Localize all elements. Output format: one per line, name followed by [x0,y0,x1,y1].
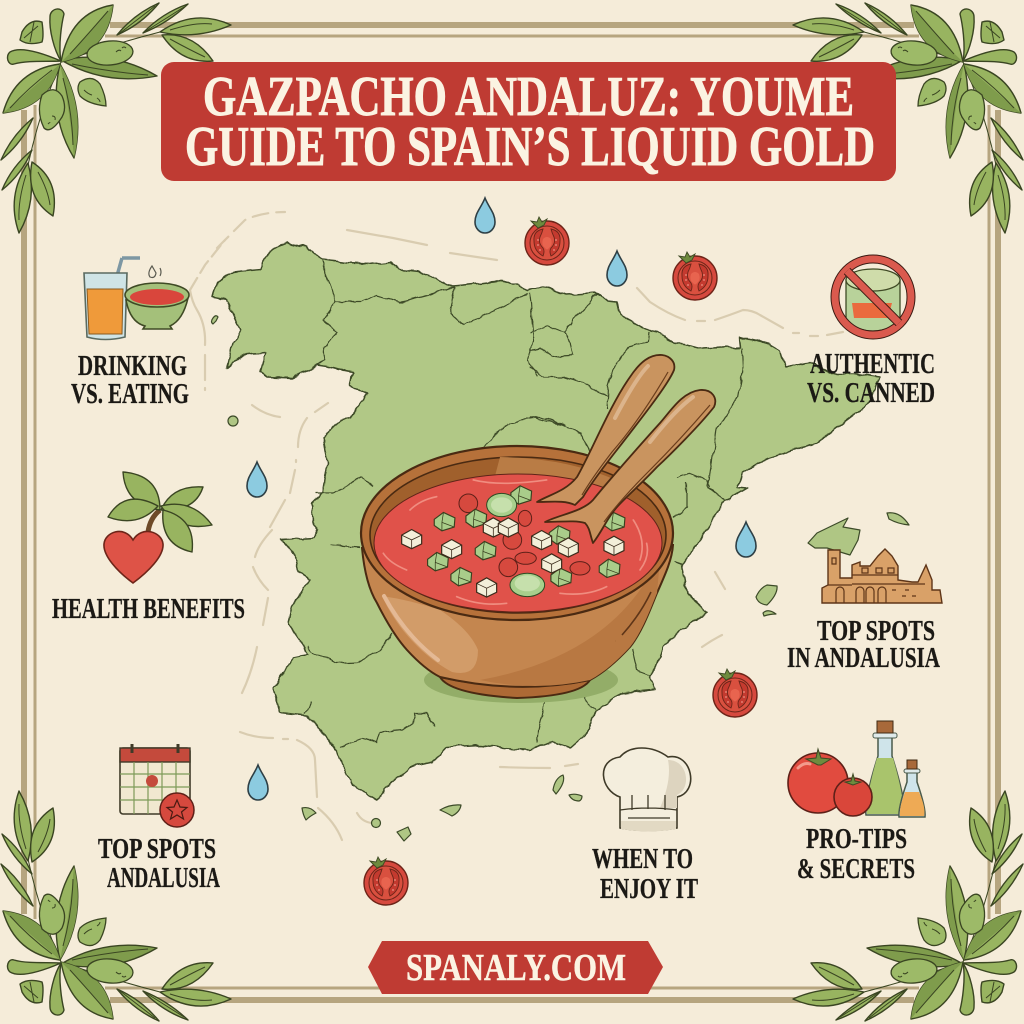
floating water drops [247,198,756,800]
footer ribbon [368,941,663,994]
label: AUTHENTIC [810,348,935,380]
bowl foot [440,677,590,698]
bottom-right olive branch [793,791,1023,1021]
label: ANDALUSIA [107,862,220,894]
label: ENJOY IT [600,873,698,905]
label [592,843,698,905]
bowl body [362,545,673,687]
icon: heart and palm [104,472,212,583]
label [787,615,940,674]
label: TOP SPOTS [817,615,935,647]
label: DRINKING [78,350,187,382]
label: VS. EATING [71,378,189,410]
icon: chef hat [603,748,691,832]
label: TOP SPOTS [98,833,216,865]
label [98,833,220,894]
panel: when to enjoy it [592,748,698,905]
label [71,350,189,410]
icon: juice glass and soup bowl [84,258,189,340]
central gazpacho bowl [361,355,715,703]
icon: castle [822,549,942,603]
label [797,823,915,885]
decorative route dashes [190,212,843,840]
label: HEALTH BENEFITS [52,593,245,625]
gazpacho soup [374,474,662,612]
mainland and regions [213,243,880,800]
icon: crossed-out can [835,259,911,335]
label: WHEN TO [592,843,693,875]
vegetable pieces [402,486,625,597]
icon: calendar with badge [120,744,194,827]
panel: drinking vs eating [71,258,189,410]
top-right olive branch [793,3,1023,233]
website: SPANALY.COM [406,947,626,989]
panel: pro-tips and secrets [788,721,925,885]
floating tomato slices [364,217,757,905]
map of Spain [212,243,909,841]
label [807,348,935,409]
spoon two [545,390,715,543]
label: PRO-TIPS [806,823,907,855]
islands [808,518,860,555]
title banner [161,62,896,181]
panel: authentic vs canned [807,259,935,409]
bowl rim [361,446,673,620]
label: IN ANDALUSIA [787,642,940,674]
icon: tomatoes and oil bottles [788,721,925,817]
spoon one [537,355,674,505]
panel: top spots in andalusia [787,549,942,674]
panel: top spots andalusia (calendar) [98,744,220,894]
bottom-left olive branch [1,791,231,1021]
label: & SECRETS [797,853,915,885]
panel: health benefits [52,472,245,625]
top-left olive branch [1,3,231,233]
label: VS. CANNED [807,377,935,409]
bowl shadow [424,657,618,703]
